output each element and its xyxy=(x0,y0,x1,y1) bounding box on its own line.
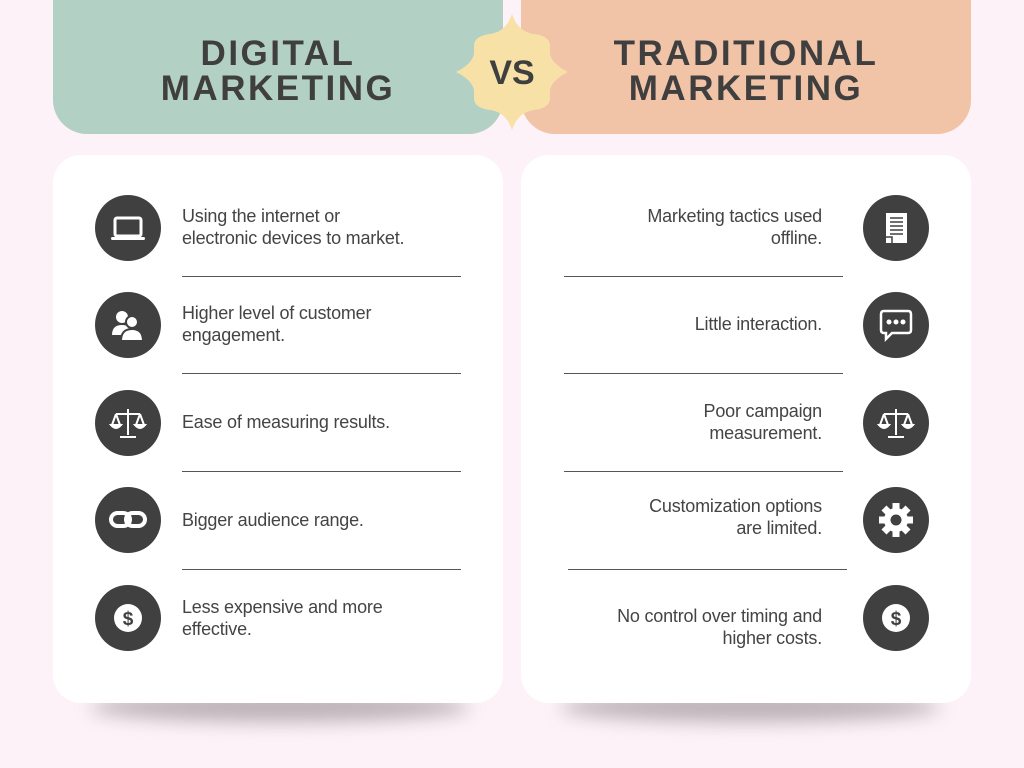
panel: traditional xyxy=(521,155,971,703)
icon: dollar: $ xyxy=(891,609,902,630)
icon: chat xyxy=(863,292,929,358)
vs badge xyxy=(456,14,568,130)
text 2: Little interaction. xyxy=(695,314,822,334)
text 5: No control over timing and higher costs. xyxy=(617,606,822,648)
icon: link xyxy=(95,487,161,553)
text 1: Marketing tactics used offline. xyxy=(647,206,822,248)
header: traditional marketing: MARKETING xyxy=(629,69,863,108)
text 3: Poor campaign measurement. xyxy=(704,401,822,443)
vs badge: VS xyxy=(489,54,535,92)
icon: scales xyxy=(863,390,929,456)
header: digital marketing: MARKETING xyxy=(161,69,395,108)
panel: digital xyxy=(53,155,503,703)
icon: gear xyxy=(863,487,929,553)
text 5: Less expensive and more effective. xyxy=(182,597,383,639)
icon: dollar: $ xyxy=(123,609,134,630)
icon: dollar xyxy=(863,585,929,651)
text 1: electronic devices to market. xyxy=(182,228,404,248)
text 3: Ease of measuring results. xyxy=(182,412,390,432)
icon: dollar xyxy=(95,585,161,651)
icon: people xyxy=(95,292,161,358)
header: digital marketing: DIGITAL xyxy=(201,34,355,73)
text 1: Using the internet or xyxy=(182,206,340,226)
icon: document xyxy=(863,195,929,261)
text 1 xyxy=(182,206,404,248)
shadows xyxy=(90,692,470,722)
text 4: Customization options are limited. xyxy=(649,496,822,538)
text 2: Higher level of customer engagement. xyxy=(182,303,371,345)
header: digital marketing xyxy=(53,0,503,134)
icon: laptop xyxy=(95,195,161,261)
text 4: Bigger audience range. xyxy=(182,510,364,530)
icon: scales xyxy=(95,390,161,456)
header: traditional marketing xyxy=(521,0,971,134)
header: traditional marketing: TRADITIONAL xyxy=(614,34,878,73)
